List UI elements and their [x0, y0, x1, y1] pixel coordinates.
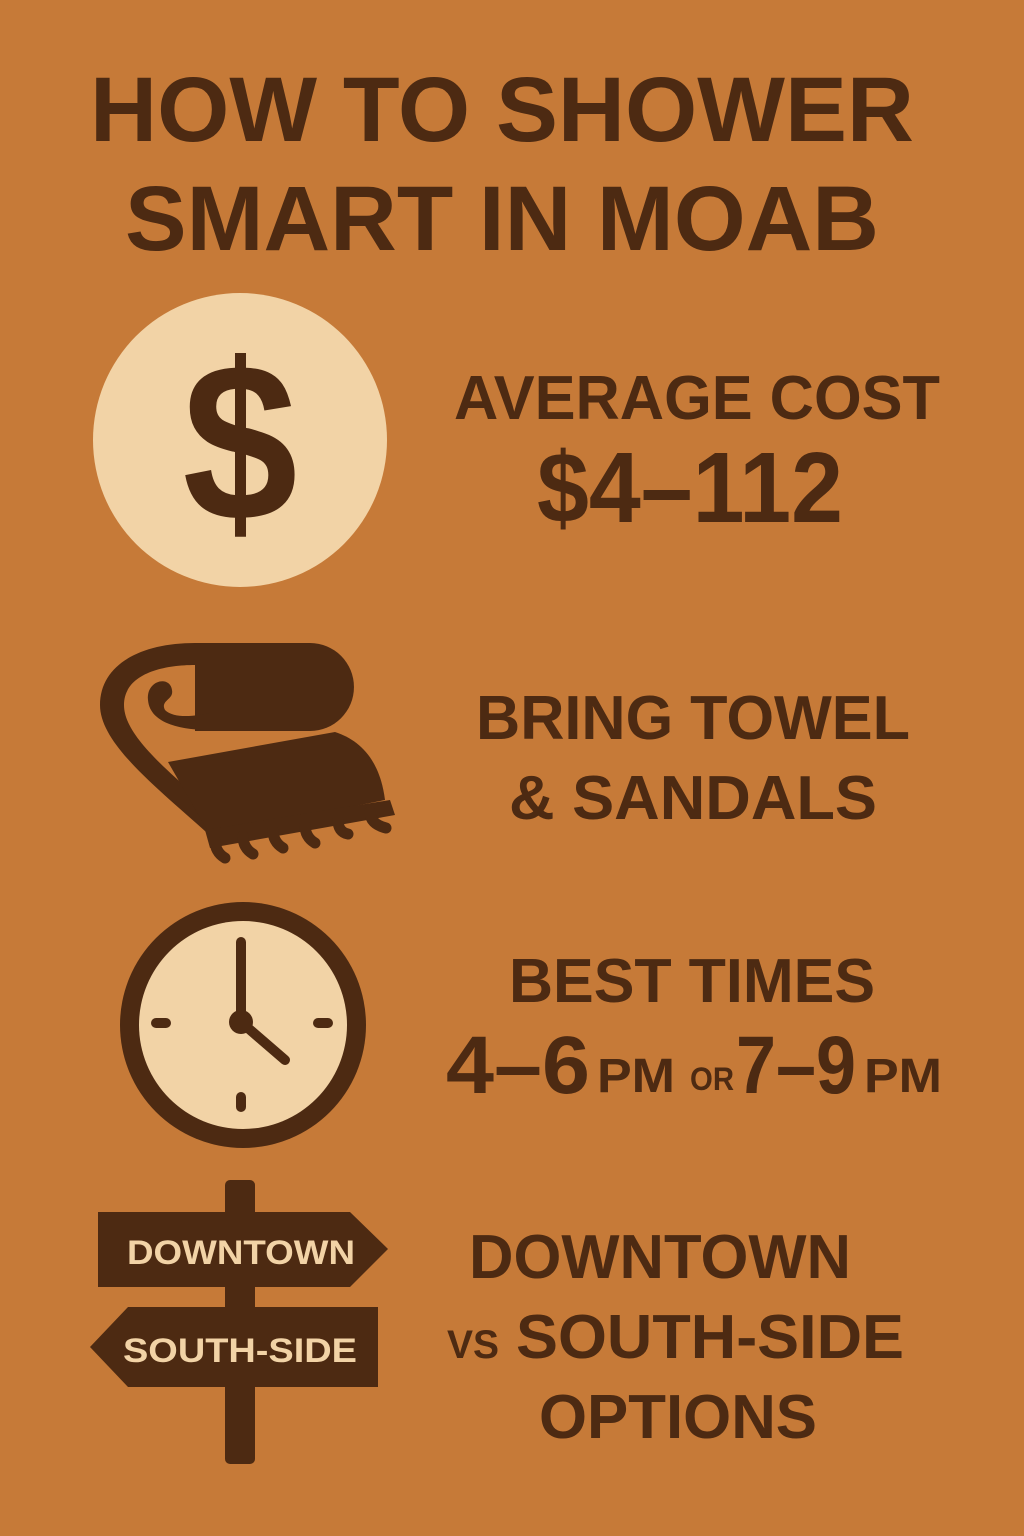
text: downtown vs south-side: VS — [447, 1323, 499, 1367]
icon: clock — [120, 902, 366, 1148]
text: best times: OR — [690, 1061, 734, 1097]
text: best times: 7–9 — [736, 1020, 856, 1111]
icon: dollar coin: $ — [182, 316, 298, 568]
icon: rolled towel — [100, 643, 395, 858]
text: downtown vs south-side — [447, 1223, 904, 1452]
text: downtown vs south-side: SOUTH-SIDE — [516, 1303, 904, 1372]
text: best times: PM — [864, 1050, 942, 1103]
text: bring towel: & SANDALS — [509, 764, 877, 833]
text: downtown vs south-side: OPTIONS — [539, 1383, 817, 1452]
text: best times: PM — [597, 1050, 675, 1103]
icon: signpost — [90, 1180, 388, 1464]
text: bring towel — [476, 684, 910, 833]
text: average cost: AVERAGE COST — [454, 364, 940, 433]
title: SMART IN MOAB — [125, 168, 879, 270]
icon: signpost: SOUTH-SIDE — [123, 1332, 357, 1370]
text: best times: 4–6 — [446, 1020, 590, 1111]
text: best times: BEST TIMES — [509, 947, 875, 1016]
text: bring towel: BRING TOWEL — [476, 684, 910, 753]
title — [90, 59, 914, 270]
icon: dollar coin — [93, 293, 387, 587]
text: average cost — [454, 364, 940, 544]
text: downtown vs south-side: DOWNTOWN — [469, 1223, 851, 1292]
title: HOW TO SHOWER — [90, 59, 914, 161]
text: average cost: $4–112 — [537, 432, 843, 544]
icon: signpost: DOWNTOWN — [127, 1234, 355, 1272]
text: best times — [446, 947, 942, 1111]
